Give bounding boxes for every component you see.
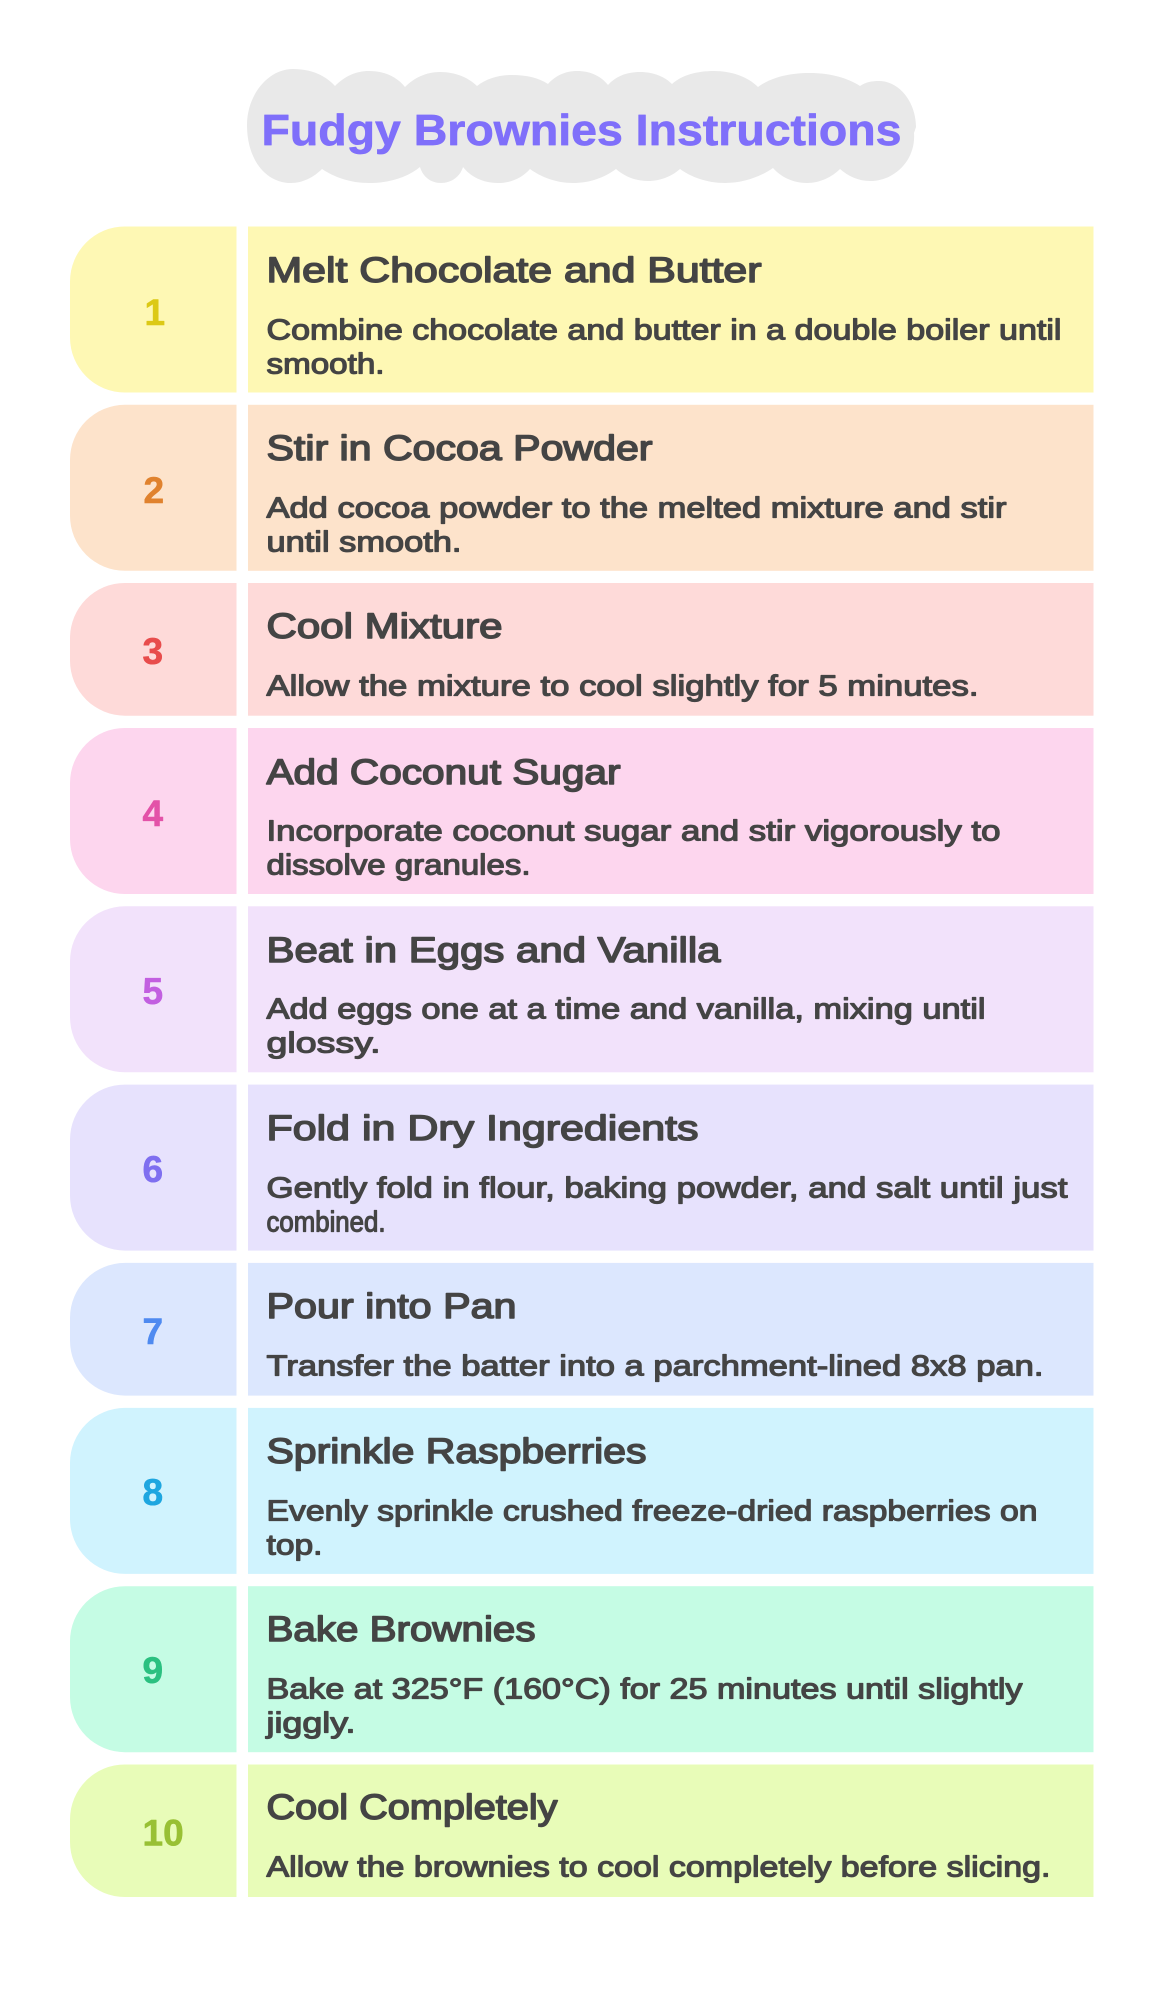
number badge (70, 226, 236, 392)
heading: Stir in Cocoa Powder (266, 429, 653, 468)
number: 4 (142, 793, 164, 834)
step 3 (70, 583, 1094, 716)
step 4 (70, 728, 1094, 894)
number badge (70, 728, 236, 894)
step 8 (70, 1408, 1094, 1574)
description: until smooth. (266, 526, 462, 558)
step 5 (70, 906, 1094, 1072)
number: 7 (142, 1311, 163, 1352)
description (266, 994, 986, 1060)
description: glossy. (266, 1028, 380, 1060)
content panel (248, 405, 1094, 571)
number badge (70, 1085, 236, 1251)
heading: Melt Chocolate and Butter (266, 251, 762, 290)
heading: Bake Brownies (266, 1610, 536, 1649)
description: Evenly sprinkle crushed freeze-dried raspberries on (266, 1496, 1038, 1528)
step 10 (70, 1764, 1094, 1897)
description (266, 1496, 1038, 1562)
step 2 (70, 405, 1094, 571)
heading: Sprinkle Raspberries (266, 1432, 646, 1471)
content panel (248, 728, 1094, 894)
heading: Pour into Pan (266, 1287, 516, 1326)
number badge (70, 405, 236, 571)
step 6 (70, 1085, 1094, 1251)
description: top. (266, 1530, 322, 1562)
description: Allow the mixture to cool slightly for 5 minutes. (266, 670, 978, 702)
content panel (248, 1586, 1094, 1752)
description: dissolve granules. (266, 850, 530, 882)
step 1 (70, 226, 1094, 392)
heading: Fold in Dry Ingredients (266, 1109, 698, 1148)
description (265, 1674, 1023, 1740)
title text: Fudgy Brownies Instructions (262, 106, 902, 155)
step 7 (70, 1263, 1094, 1396)
heading: Beat in Eggs and Vanilla (266, 931, 721, 970)
heading: Cool Completely (266, 1788, 558, 1827)
content panel (248, 1764, 1094, 1897)
description (266, 314, 1062, 380)
description: combined. (266, 1206, 386, 1238)
number badge (70, 1764, 236, 1897)
content panel (248, 583, 1094, 716)
number: 9 (142, 1650, 163, 1691)
description: Combine chocolate and butter in a double boiler until (266, 314, 1062, 346)
content panel (248, 226, 1094, 392)
cloud background (247, 69, 916, 183)
content panel (248, 1085, 1094, 1251)
description (266, 816, 1000, 882)
description: Bake at 325°F (160°C) for 25 minutes until slightly (266, 1674, 1023, 1706)
number badge (70, 583, 236, 716)
content panel (248, 1263, 1094, 1396)
number badge (70, 1586, 236, 1752)
number: 1 (144, 292, 165, 333)
content panel (248, 906, 1094, 1072)
heading: Cool Mixture (266, 607, 502, 646)
description: Transfer the batter into a parchment-lined 8x8 pan. (266, 1350, 1044, 1382)
title (247, 69, 916, 183)
number badge (70, 1408, 236, 1574)
description: Add cocoa powder to the melted mixture and stir (266, 492, 1007, 524)
description: Add eggs one at a time and vanilla, mixing until (266, 994, 986, 1026)
number: 3 (142, 631, 163, 672)
number: 5 (142, 971, 163, 1012)
step 9 (70, 1586, 1094, 1752)
description: Gently fold in flour, baking powder, and salt until just (266, 1172, 1068, 1204)
description (266, 492, 1007, 558)
number: 6 (142, 1149, 163, 1190)
heading: Add Coconut Sugar (266, 753, 621, 792)
number: 8 (142, 1472, 163, 1513)
number: 10 (142, 1812, 184, 1854)
number badge (70, 1263, 236, 1396)
content panel (248, 1408, 1094, 1574)
description (266, 1172, 1068, 1238)
number badge (70, 906, 236, 1072)
description: Allow the brownies to cool completely before slicing. (266, 1852, 1050, 1884)
description: Incorporate coconut sugar and stir vigorously to (266, 816, 1000, 848)
number: 2 (144, 470, 164, 511)
description: smooth. (266, 348, 384, 380)
description: jiggly. (265, 1708, 356, 1740)
